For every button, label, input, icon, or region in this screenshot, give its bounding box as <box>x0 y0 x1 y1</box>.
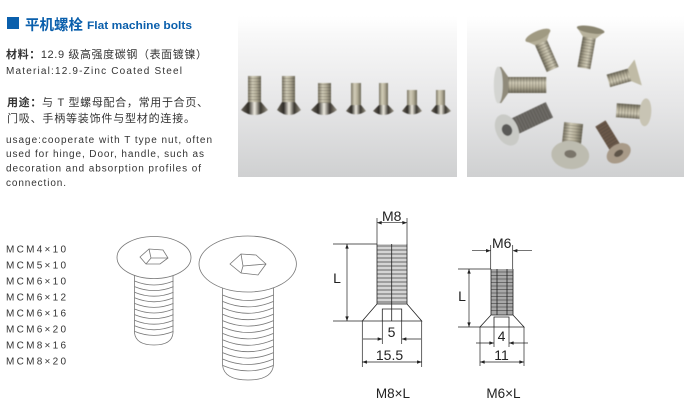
M8 dimension labels: 5 <box>388 324 396 340</box>
list of model numbers: MCM6×16 <box>6 309 66 320</box>
photo panel: circle of bolts <box>467 16 684 177</box>
line drawing: large bolt <box>199 236 296 380</box>
bolt D <box>615 96 652 127</box>
M8 dimension labels: M8 <box>382 208 402 224</box>
title: 平机螺栓 <box>25 16 84 34</box>
text block: usage English: decoration and absorption profiles of <box>6 164 201 174</box>
bolt C <box>605 59 642 94</box>
M6 head <box>480 315 524 327</box>
list of model numbers: MCM4×10 <box>6 245 66 256</box>
caption: M8×L: M8×L <box>376 386 411 401</box>
M6 dimension labels <box>458 235 512 363</box>
bolt photo 3 <box>311 83 337 115</box>
text block: material <box>6 47 207 77</box>
list of model numbers <box>6 245 66 368</box>
bolt G <box>490 95 557 150</box>
M6 dimension labels: L <box>458 288 466 304</box>
line drawing: small bolt <box>117 236 191 345</box>
bolt photo 4 <box>346 83 366 114</box>
list of model numbers: MCM6×20 <box>6 325 66 336</box>
bolt E <box>589 117 634 168</box>
title <box>7 16 192 34</box>
M8 dimension labels <box>333 208 403 363</box>
text block: material: 材料：12.9 级高强度碳钢（表面镀镍） <box>6 47 207 61</box>
M8 dimension labels: L <box>333 270 341 286</box>
M8 head <box>362 304 422 321</box>
technical drawing: M6 bolt <box>458 235 532 366</box>
bolt A <box>524 26 565 75</box>
list of model numbers: MCM8×16 <box>6 341 66 352</box>
text block: usage Chinese <box>7 95 208 125</box>
list of model numbers: MCM6×10 <box>6 277 66 288</box>
title: Flat machine bolts <box>87 20 192 32</box>
bolt B <box>570 24 605 71</box>
bolt photo 6 <box>402 90 422 114</box>
photo panel: row of bolts <box>238 16 457 177</box>
M6 thread body <box>491 269 513 315</box>
text block: usage English: usage:cooperate with T type nut, often <box>6 135 212 146</box>
text block: usage English <box>6 135 212 189</box>
text block: usage English: connection. <box>6 178 66 189</box>
bolt photo 1 <box>241 76 268 115</box>
M6 dimension labels: M6 <box>492 235 512 251</box>
list of model numbers: MCM8×20 <box>6 357 66 368</box>
M6 dimension labels: 4 <box>498 328 506 344</box>
text block: usage Chinese: 用途：与 T 型螺母配合，常用于合页、 <box>7 95 208 109</box>
text block: material: Material:12.9-Zinc Coated Steel <box>6 66 182 77</box>
bolt photo 7 <box>431 90 451 114</box>
M6 dimension labels: 11 <box>494 347 509 363</box>
M8 dimension labels: 15.5 <box>376 347 403 363</box>
caption: M6×L: M6×L <box>486 386 521 401</box>
bolt F <box>550 121 593 171</box>
text block: usage English: used for hinge, Door, handle, such as <box>6 149 204 160</box>
bolt H <box>494 66 546 104</box>
list of model numbers: MCM5×10 <box>6 261 66 272</box>
M6 dimension lines <box>458 245 532 366</box>
bolt photo 5 <box>373 83 394 115</box>
M8 thread body <box>377 244 407 321</box>
M8 dimension lines <box>333 218 422 367</box>
bolt photo 2 <box>277 76 301 115</box>
list of model numbers: MCM6×12 <box>6 293 66 304</box>
technical drawing: M8 bolt <box>333 208 422 367</box>
text block: usage Chinese: 门吸、手柄等装饰件与型材的连接。 <box>7 111 195 125</box>
